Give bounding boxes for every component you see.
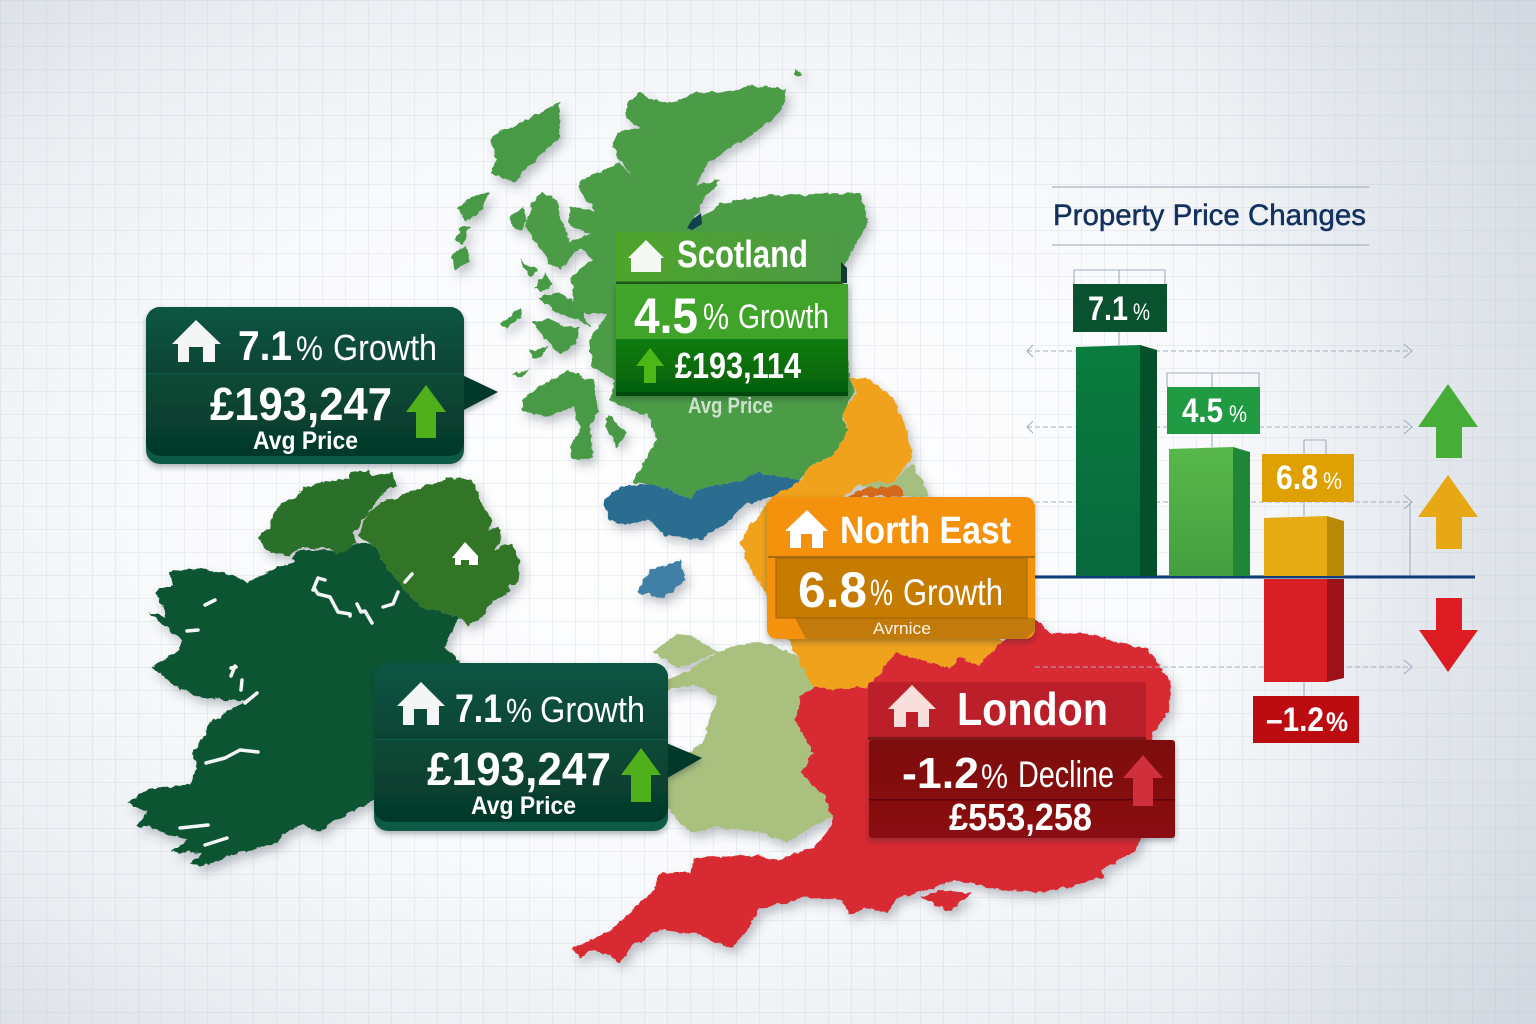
decline text bbox=[902, 749, 1114, 798]
panel: property price changes chart bbox=[1027, 187, 1478, 743]
price label: Avg Price bbox=[471, 792, 576, 820]
callout: North East bbox=[767, 497, 1035, 639]
growth text: % bbox=[296, 330, 323, 368]
map: Ireland bbox=[127, 470, 520, 867]
label: 4.5%: % bbox=[1229, 401, 1247, 428]
region: Northern and central England orange bbox=[740, 378, 1003, 690]
rivers and loughs of Ireland bbox=[180, 574, 412, 845]
region: Scottish islands bbox=[452, 70, 801, 460]
growth text bbox=[798, 562, 1003, 618]
label: 4.5%: 4.5 bbox=[1182, 392, 1223, 430]
growth text: 6.8 bbox=[798, 562, 867, 618]
region: Scotland mainland bbox=[525, 85, 869, 500]
price label: Avg Price bbox=[253, 427, 358, 455]
heading: Scotland bbox=[677, 234, 808, 276]
label: 6.8%: 6.8 bbox=[1276, 459, 1318, 497]
London header band bbox=[868, 682, 1146, 738]
price label: Avrnice bbox=[873, 619, 931, 638]
decline text: % bbox=[981, 758, 1008, 796]
decline text: -1.2 bbox=[902, 749, 979, 798]
growth text: 7.1 bbox=[455, 687, 502, 731]
region: Southern England red bbox=[572, 617, 1171, 963]
callout: lower 7.1% growth bbox=[374, 663, 702, 831]
growth text: % bbox=[703, 296, 729, 337]
region: Donegal bbox=[258, 470, 397, 555]
Scotland header band bbox=[616, 232, 847, 284]
label: -1.2% bbox=[1253, 696, 1359, 743]
arrow: red up bbox=[1123, 755, 1163, 806]
icon: house bbox=[888, 685, 936, 727]
bar: 7.1% bbox=[1076, 345, 1157, 576]
map: Great Britain bbox=[452, 70, 1171, 963]
growth text: 7.1 bbox=[238, 322, 292, 369]
icon: house bbox=[397, 682, 445, 725]
region: pale green Yorkshire coast bbox=[858, 463, 928, 497]
region: Northern Ireland bbox=[358, 477, 520, 625]
callout: Scotland bbox=[616, 232, 848, 418]
arrow: up bbox=[636, 348, 664, 383]
label: 7.1% bbox=[1073, 284, 1167, 332]
region: Republic of Ireland bbox=[127, 543, 462, 867]
bar: -1.2% bbox=[1264, 579, 1344, 682]
icon: house bbox=[628, 240, 664, 272]
growth text bbox=[634, 288, 829, 344]
label: -1.2%: % bbox=[1326, 707, 1348, 737]
region: Isle of Wight bbox=[922, 890, 971, 910]
bar: 4.5% bbox=[1169, 447, 1250, 576]
icon: house bbox=[785, 510, 828, 548]
price text: £193,247 bbox=[427, 743, 611, 795]
label: -1.2%: –1.2 bbox=[1266, 701, 1324, 739]
axis bbox=[1035, 576, 1475, 578]
region: Northern England blue bbox=[603, 473, 800, 540]
callout: London bbox=[868, 682, 1175, 839]
growth text bbox=[455, 687, 645, 731]
arrow: up bbox=[621, 748, 661, 802]
growth text: Growth bbox=[540, 689, 645, 730]
arrow: green up bbox=[1418, 384, 1478, 458]
region: Isle of Man bbox=[637, 560, 685, 598]
price text: £553,258 bbox=[949, 797, 1092, 839]
label: 7.1%: % bbox=[1133, 299, 1150, 326]
growth text: % bbox=[870, 572, 893, 613]
heading: London bbox=[957, 683, 1108, 735]
arrow: red down bbox=[1419, 598, 1478, 672]
growth text: Growth bbox=[333, 327, 437, 368]
icon: house bbox=[172, 320, 221, 362]
growth text: Growth bbox=[903, 572, 1003, 613]
loch mark bbox=[687, 213, 702, 230]
growth band bbox=[616, 284, 848, 396]
heading: North East bbox=[840, 510, 1011, 552]
decline text: Decline bbox=[1018, 754, 1114, 795]
icon: house on Northern Ireland bbox=[452, 542, 478, 565]
growth text: % bbox=[506, 692, 532, 729]
dashed guide lines bbox=[1027, 270, 1412, 696]
arrow: amber up bbox=[1418, 475, 1478, 549]
region: Wales bbox=[653, 633, 833, 842]
chart title bbox=[1052, 187, 1369, 245]
price text: £193,247 bbox=[210, 378, 392, 430]
growth text bbox=[238, 322, 437, 369]
arrow: up bbox=[406, 385, 446, 438]
label: 6.8% bbox=[1262, 454, 1354, 502]
region: small orange-red area bbox=[843, 487, 905, 497]
label: 4.5% bbox=[1167, 387, 1260, 434]
chart title: Property Price Changes bbox=[1053, 199, 1366, 232]
decline band bbox=[868, 737, 1175, 838]
price label: Avg Price bbox=[688, 393, 773, 418]
callout: top-left 7.1% growth bbox=[146, 307, 498, 464]
growth text: 4.5 bbox=[634, 288, 698, 344]
price text: £193,114 bbox=[675, 345, 801, 386]
label: 7.1%: 7.1 bbox=[1088, 290, 1128, 328]
label: 6.8%: % bbox=[1323, 468, 1342, 495]
bar: 6.8% bbox=[1264, 516, 1344, 576]
growth text: Growth bbox=[738, 298, 829, 336]
